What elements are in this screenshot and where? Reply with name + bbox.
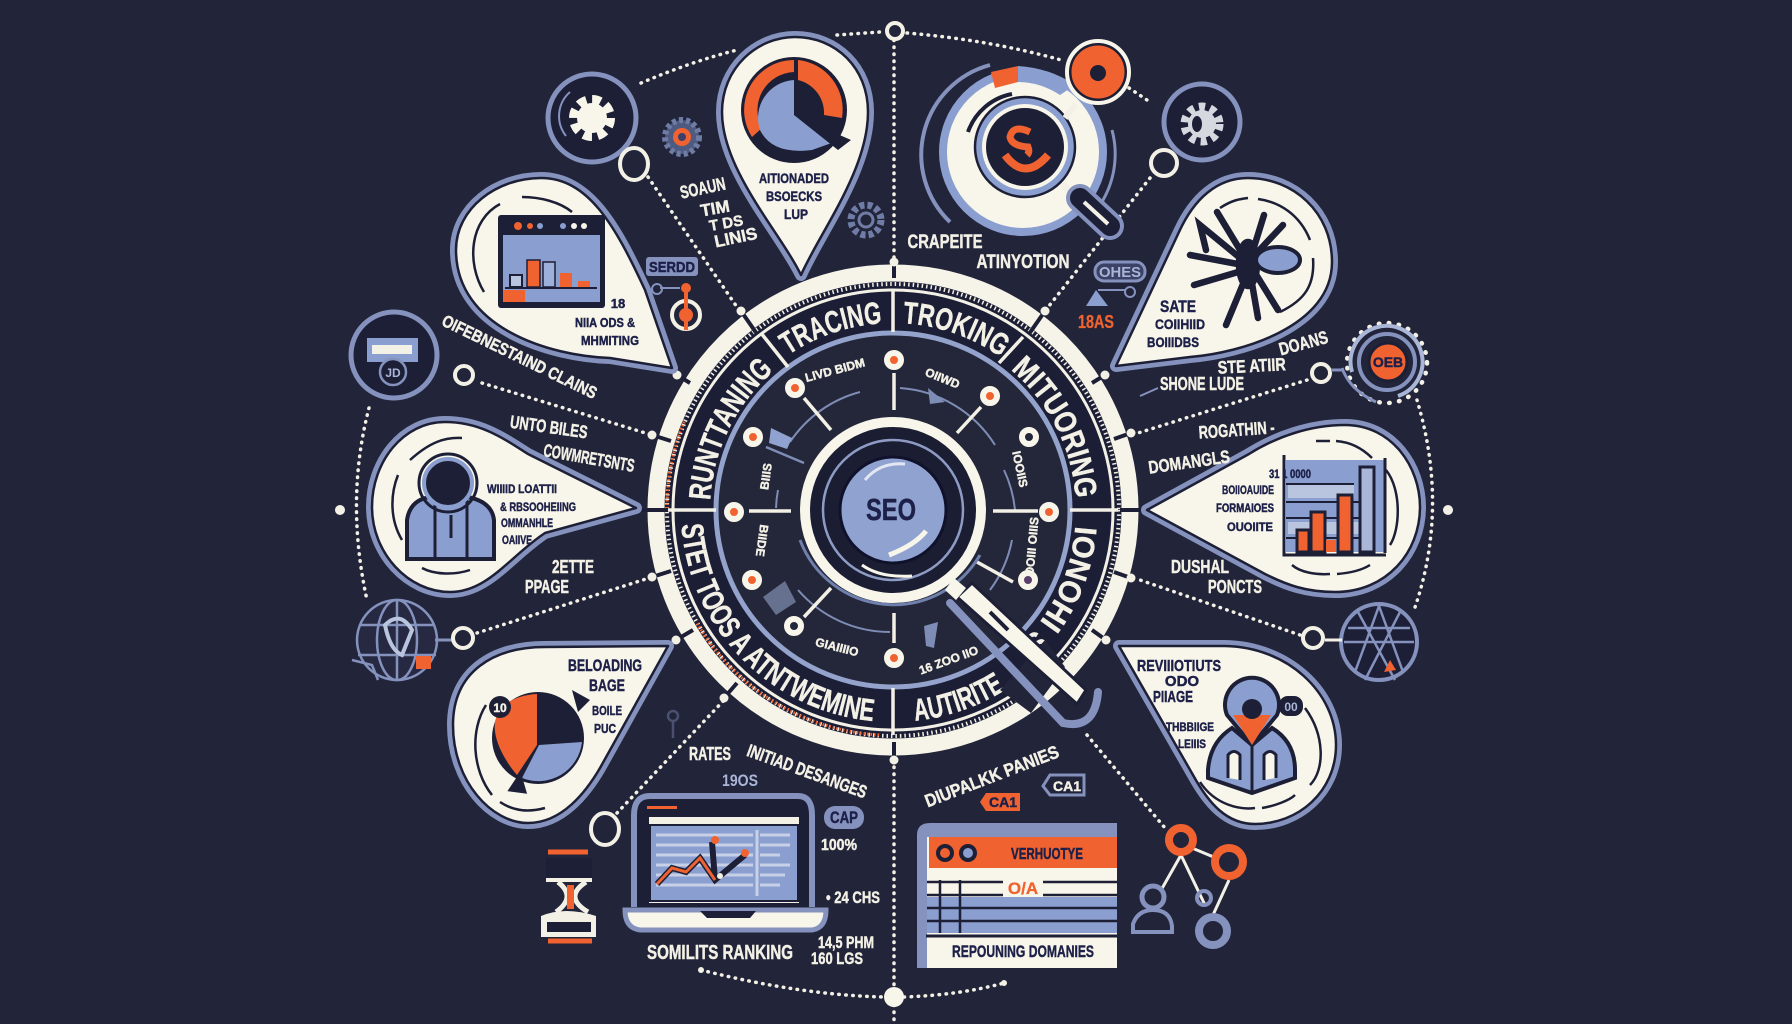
panel: top pin: BSOECKS: [766, 188, 822, 204]
text: top left note: TIM: [699, 197, 731, 220]
icon: faint pin: [668, 711, 678, 738]
text: attribution: ATINYOTION: [976, 252, 1070, 273]
text: top left note: T DS: [708, 212, 745, 235]
central dial: IOOIIS: [1009, 450, 1031, 489]
text: left middle labels: COWMRETSNTS: [542, 440, 636, 476]
text: right labels: DOMANGLS: [1147, 446, 1231, 478]
text: laptop labels: RATES: [689, 744, 731, 764]
teardrop text: 18: [611, 296, 625, 311]
icon: gear badge top right: [1151, 84, 1240, 176]
text: top left note: LINIS: [713, 224, 759, 251]
pin teardrop text: REVIIIOTIUTS: [1137, 658, 1221, 675]
node: ring left upper: [455, 366, 473, 384]
inner small labels: LIVD BIDM: [804, 355, 866, 385]
band disc: [665, 282, 1121, 738]
panel: pie teardrop: BAGE: [589, 676, 625, 695]
pie gauge icon: [741, 57, 851, 163]
pie text: BELOADING: [568, 656, 642, 675]
panel: person pin teardrop: [1119, 646, 1336, 824]
chart text: 31 1 0000: [1269, 467, 1311, 481]
text: right labels: ROGATHIN -: [1198, 417, 1275, 443]
panel: person pin teardrop: PIIAGE: [1153, 689, 1193, 706]
icon: hourglass: [541, 852, 596, 941]
text: report labels: CA1: [1053, 778, 1081, 794]
text: upper right labels: [1140, 327, 1330, 396]
panel: top pin: [722, 37, 868, 275]
text: attribution: [908, 232, 1070, 273]
panel: screen teardrop: MHMITING: [581, 333, 639, 348]
text: left upper label: OIFEBNESTAIND CLAINS: [439, 311, 600, 403]
teardrop text: WIIIID LOATTII: [487, 482, 557, 496]
handle: [1062, 184, 1076, 197]
pie chart: 10: [493, 701, 507, 715]
person pin icon: [1208, 678, 1303, 793]
node dots on ring: [648, 258, 1136, 764]
central dial: STET TOOS A ATNTWEMINE: [682, 524, 875, 722]
text: right labels: [1147, 417, 1275, 597]
connector lines: [335, 32, 1453, 1024]
text: upper right labels: DOANS: [1277, 327, 1330, 359]
text: right labels: PONCTS: [1208, 577, 1262, 597]
panel: screen teardrop: [456, 178, 672, 368]
icon: orange target right: [1342, 323, 1427, 403]
panel: person pin teardrop: THBBIIGE: [1166, 720, 1214, 734]
text: top left note: [678, 174, 759, 251]
icon: globe right: [1341, 604, 1417, 680]
SEO label: SEO: [866, 492, 916, 527]
central dial: OIIWD: [923, 365, 962, 392]
panel: chart teardrop: BOIIOAUIDE: [1222, 483, 1274, 497]
panel: chart teardrop: OUOIITE: [1227, 520, 1273, 534]
icon: orange S: [1010, 129, 1030, 155]
panel: chart teardrop: [1147, 425, 1420, 592]
bar chart: [1284, 455, 1386, 555]
text: laptop labels: [647, 740, 880, 968]
text: left middle labels: 2ETTE: [552, 557, 594, 577]
band dividers: [668, 290, 1118, 735]
callout: search tag: SERDD: [649, 259, 695, 276]
text: left middle labels: PPAGE: [525, 577, 569, 597]
icon: orange target right: OEB: [1373, 354, 1403, 370]
node: bottom centre: [884, 987, 904, 1007]
icon: network nodes: [1133, 828, 1243, 945]
panel: top pin: LUP: [784, 206, 808, 222]
panel: laptop: [625, 796, 826, 930]
person pin icon: 00: [1284, 700, 1298, 714]
text: laptop labels: 19OS: [722, 771, 758, 790]
central dial: GIAIIIIO: [814, 635, 860, 659]
line chart: [657, 842, 745, 884]
text: laptop labels: • 24 CHS: [826, 888, 880, 907]
text: laptop labels: 160 LGS: [811, 949, 863, 968]
icon: small gear: [665, 120, 699, 154]
panel: report card: [917, 823, 1117, 968]
text: left middle labels: [509, 412, 636, 597]
handle gap: [1000, 640, 1065, 713]
spider text: SATE: [1160, 297, 1196, 316]
icon: globe left: [352, 600, 437, 680]
panel: person teardrop left: OAIIVE: [502, 533, 532, 547]
ring gaps: [642, 258, 1144, 762]
icon: orange target top: [1067, 41, 1129, 103]
panel: report card: O/A: [1008, 879, 1038, 898]
central dial: BIIDE: [753, 524, 771, 557]
central dial: IONOHI S: [1029, 528, 1097, 644]
panel: screen teardrop: NIIA ODS &: [575, 315, 635, 330]
node: ring bottom left: [591, 813, 619, 845]
icon: label badge: [351, 312, 437, 398]
browser window icon: [498, 215, 605, 308]
text: report labels: CA1: [989, 794, 1017, 810]
pie chart: [489, 690, 590, 792]
text: right labels: DUSHAL: [1171, 557, 1229, 577]
callout: search tag: [646, 257, 700, 330]
panel: person pin teardrop: LEIIIS: [1178, 737, 1206, 751]
panel: report card: VERHUOTYE: [1011, 846, 1083, 863]
node: ring globe right: [1303, 628, 1342, 648]
panel: spider teardrop: BOIIIDBS: [1147, 334, 1199, 350]
central dial: BIIIS: [757, 462, 775, 491]
band labels: TRACING: [777, 302, 881, 352]
node: ring globe left: [435, 628, 473, 648]
node: ring upper right: [1312, 364, 1344, 382]
magnifier handle: [945, 578, 1098, 724]
text: laptop labels: SOMILITS RANKING: [647, 942, 793, 964]
icon: label badge: JD: [385, 366, 401, 380]
central dial: OOIII OIIIS: [1022, 516, 1042, 577]
panel: pie teardrop: PUC: [594, 721, 616, 736]
panel: person teardrop left: [372, 422, 636, 592]
central dial: RUNTTANING: [688, 358, 771, 499]
central dial: [648, 258, 1138, 764]
central dial: 16 ZOO IIO: [917, 643, 980, 677]
text: report labels: DIUPALKK PANIES: [922, 742, 1062, 811]
text: laptop labels: 14,5 PHM: [818, 933, 874, 952]
text: upper right labels: SHONE LUDE: [1160, 374, 1244, 394]
text: laptop labels: CAP: [830, 808, 858, 827]
text: left middle labels: UNTO BILES: [509, 412, 589, 442]
node: top centre: [887, 23, 903, 39]
panel: person teardrop left: & RBSOOHEIING: [500, 500, 576, 514]
magnifier lens: [805, 422, 981, 598]
text: laptop labels: INITIAD DESANGES: [744, 740, 870, 802]
text: top left note: SOAUN: [678, 174, 727, 203]
inner dashed arcs: [776, 388, 1015, 632]
text: upper right labels: STE ATIIR: [1217, 354, 1286, 378]
central dial: MITUORING: [1012, 354, 1096, 496]
spokes: [749, 373, 1038, 643]
person icon: [407, 454, 494, 559]
panel: chart teardrop: FORMAIOES: [1216, 501, 1274, 515]
icon: small spiral gear: [851, 205, 881, 235]
panel: magnifier badge top right: [921, 65, 1115, 232]
panel: report card: REPOUNING DOMANIES: [952, 942, 1094, 961]
spider icon: [1190, 212, 1300, 325]
panel: pie teardrop: [453, 646, 668, 823]
panel: person teardrop left: OMMANHLE: [501, 516, 553, 530]
pin text: AITIONADED: [759, 170, 829, 186]
central dial: TROKING: [904, 302, 1009, 354]
panel: pie teardrop: BOILE: [592, 703, 622, 718]
panel: spider teardrop: COIIHIID: [1155, 316, 1205, 332]
callout: ohes tag: 18AS: [1078, 312, 1114, 332]
spoke nodes: [727, 353, 1056, 665]
inner small icons: [769, 428, 792, 449]
panel: person pin teardrop: ODO: [1165, 673, 1199, 690]
text: laptop labels: 100%: [821, 837, 857, 854]
text: attribution: CRAPEITE: [908, 232, 982, 253]
panel: spider teardrop: [1116, 178, 1332, 366]
icon: gear badge top left: [548, 74, 648, 180]
outer cream ring: [656, 273, 1130, 747]
central dial: AUTIRITE: [915, 672, 1003, 721]
callout: ohes tag: OHES: [1099, 264, 1141, 281]
callout: ohes tag: [1078, 262, 1145, 332]
